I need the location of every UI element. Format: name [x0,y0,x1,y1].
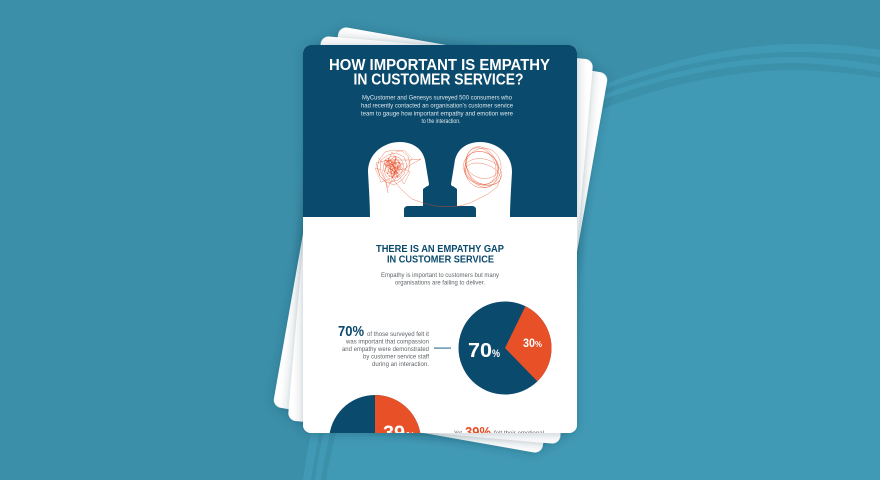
section heading [376,245,504,262]
intro text: MyCustomer and Genesys surveyed 500 consumers who [362,94,512,102]
background curved bands [303,44,880,480]
title [330,59,550,84]
section intro text: organisations are failing to deliver. [395,280,485,287]
statistic text: 70%: during an interaction. [372,361,429,368]
section heading: IN CUSTOMER SERVICE [387,254,494,266]
scribble: right tangle [463,146,502,188]
shoulders base [404,206,476,217]
main infographic card [303,45,577,433]
intro text [361,94,513,125]
statistic text: 70%: by customer service staff [363,354,429,360]
pie chart: 70 / 30: 30 [523,336,535,350]
header panel [303,45,577,217]
statistic text: 39% [454,427,544,433]
section intro text [381,272,500,287]
pie chart: 70 / 30: 70 [468,340,492,362]
icon: right head [451,142,512,217]
back sheet, most rotated [273,26,608,454]
intro text: to the interaction. [422,118,461,125]
statistic text: 70%: 70% [338,324,364,340]
statistic text: 70%: and empathy were demonstrated [342,346,429,353]
title: IN CUSTOMER SERVICE? [354,72,524,88]
section intro text: Empathy is important to customers but many [381,272,500,279]
main card shadow [303,45,577,433]
pie chart: 70 / 30 [458,302,552,394]
illustration: two heads connected by a tangled thread [368,142,512,217]
icon: left head [368,142,429,217]
title: HOW IMPORTANT IS EMPATHY [329,57,551,74]
connector line [434,348,451,349]
section heading: THERE IS AN EMPATHY GAP [376,243,504,255]
pie chart: 39 / 61 [330,395,420,433]
statistic text: 39%: 39% [465,425,491,441]
statistic text: 39%: Yet [454,430,462,437]
pie chart: 39 / 61: % [406,430,415,442]
statistic text: 39%: felt their emotional [494,430,544,437]
scribble: left tangle [375,150,500,206]
statistic text: 70%: of those surveyed felt it [367,331,429,338]
back sheet, slightly rotated [288,36,593,444]
pie chart: 70 / 30: % [492,348,500,360]
intro text: had recently contacted an organisation’s customer service [361,102,513,110]
statistic text: 70% [338,324,429,368]
pie chart: 39 / 61: 39 [383,422,405,444]
intro text: team to gauge how important empathy and emotion were [361,110,513,118]
pie chart: 70 / 30: % [535,340,542,349]
statistic text: 70%: was important that compassion [345,338,429,346]
